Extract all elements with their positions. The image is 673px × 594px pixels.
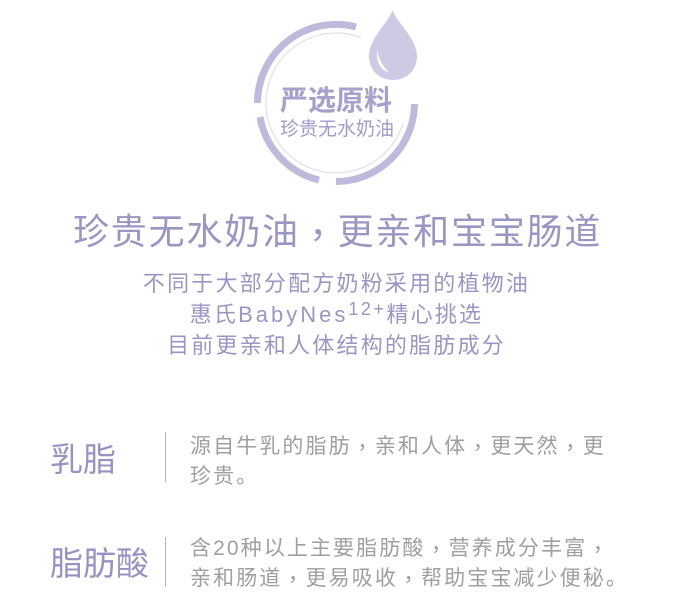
description: milk fat: 珍贵。 xyxy=(190,465,259,488)
badge heading: 严选原料 xyxy=(280,85,392,116)
description: fatty acids xyxy=(190,534,629,594)
description: fatty acids: 亲和肠道，更易吸收，帮助宝宝减少便秘。 xyxy=(190,564,629,594)
icon: ring badge with water drop xyxy=(254,10,418,185)
intro text block xyxy=(143,271,530,358)
intro text block: 目前更亲和人体结构的脂肪成分 xyxy=(167,333,506,358)
description: milk fat xyxy=(190,432,606,488)
icon: water drop xyxy=(369,10,417,80)
label: fatty acids: 脂肪酸 xyxy=(50,545,149,582)
description: milk fat: 源自牛乳的脂肪，亲和人体，更天然，更 xyxy=(190,432,606,462)
outer ring arcs xyxy=(257,24,414,182)
label: milk fat: 乳脂 xyxy=(50,441,116,478)
row: fatty acids xyxy=(50,534,629,594)
intro text block: 惠氏BabyNes12+精心挑选 xyxy=(190,299,483,327)
description: fatty acids: 含20种以上主要脂肪酸，营养成分丰富， xyxy=(190,534,610,564)
intro text block: 不同于大部分配方奶粉采用的植物油 xyxy=(143,271,530,296)
title: 珍贵无水奶油，更亲和宝宝肠道 xyxy=(73,207,602,259)
row: milk fat xyxy=(50,432,606,488)
inner thin ring xyxy=(266,33,403,173)
badge subheading: 珍贵无水奶油 xyxy=(280,119,394,140)
